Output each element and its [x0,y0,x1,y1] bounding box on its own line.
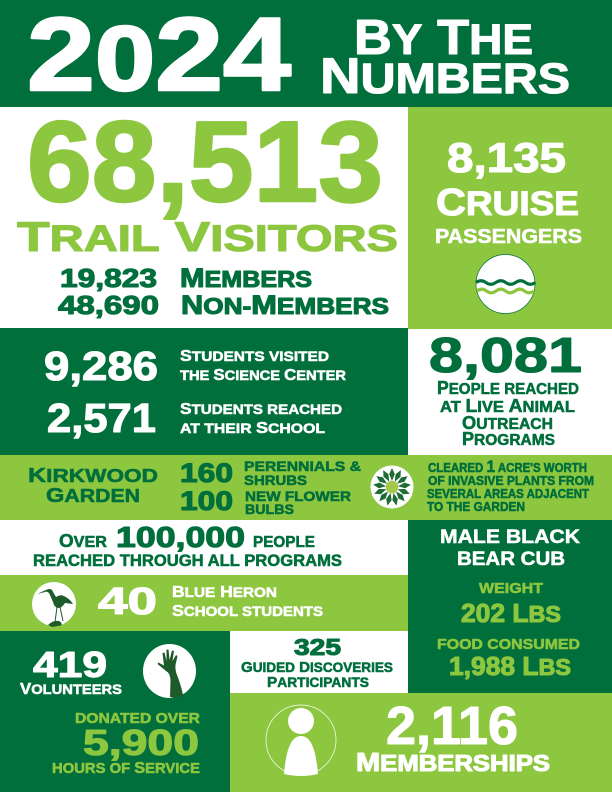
heading: trail visitors: TRAIL V ISITORS [17,213,398,260]
panel: guided discoveries [230,631,408,693]
number: 100: 100 [180,486,233,516]
number: 40: 40 [98,581,157,623]
number: trail visitors total: 68,513 [27,99,383,226]
label: participants: PARTICIPANTS [267,674,369,691]
number: 100,000: 100,000 [116,522,245,554]
label: hours of service: HOURS OF SERVICE [52,760,200,777]
heading: garden: GARDEN [46,485,140,507]
number: bear weight: 202 LBS [461,598,561,628]
number: memberships: 2,116 [386,696,518,756]
panel: blue heron school [0,575,408,631]
icon: heron [32,582,76,627]
label: programs: PROGRAMS [462,429,555,449]
panel: live animal outreach [408,329,612,455]
text: over: OVER [59,531,107,551]
label: guided discoveries: GUIDED DISCOVERIES [241,659,393,676]
text: cleared line 1: CLEARED 1 ACRE'S WORTH [428,457,587,476]
label: passengers: PASSENGERS [435,226,582,248]
label: the science center: THE SCIENCE CENTER [180,367,346,384]
panel: memberships [230,693,612,792]
panel: volunteers [0,631,230,792]
label: non-members: NON-MEMBERS [181,290,389,320]
label: bulbs: BULBS [245,501,294,517]
icon: water waves [476,254,535,314]
label: people reached: PEOPLE REACHED [437,378,579,398]
heading: kirkwood: KIRKWOOD [28,465,158,487]
label: memberships: MEMBERSHIPS [356,747,550,777]
heading: male black: MALE BLACK [440,526,580,548]
number: hours: 5,900 [83,722,199,763]
title: By The: BY THE [354,11,533,65]
panel: students [0,329,408,455]
title: 2024: 2024 [27,0,291,113]
heading: cruise: CRUISE [436,182,579,224]
label: food consumed: FOOD CONSUMED [437,637,580,653]
number: food consumed: 1,988 LBS [449,651,571,681]
icon: flower [370,466,414,508]
label: at their school: AT THEIR SCHOOL [180,420,325,437]
number: participants: 325 [294,634,341,660]
number: people reached: 8,081 [429,329,582,383]
heading: bear cub: BEAR CUB [457,548,565,570]
label: students reached: STUDENTS REACHED [180,401,342,418]
number: volunteers: 419 [33,644,107,685]
label: outreach: OUTREACH [462,413,553,433]
text: people: PEOPLE [253,534,315,551]
number: 160: 160 [180,458,233,488]
label: new flower: NEW FLOWER [245,488,351,504]
number: school students: 2,571 [47,395,156,441]
icon: raised hand [143,644,196,698]
label: shrubs: SHRUBS [244,472,307,488]
number: science center students: 9,286 [44,343,158,389]
text: cleared line 4: TO THE GARDEN [427,500,525,514]
icon: person [266,705,336,776]
label: blue heron: BLUE HERON [172,584,277,601]
label: perennials: PERENNIALS & [244,458,361,474]
panel: header [0,0,612,113]
text: reached through all programs: REACHED THROUGH ALL PROGRAMS [33,552,342,570]
text: cleared line 2: OF INVASIVE PLANTS FROM [428,474,594,488]
panel: all programs [0,520,408,575]
text: cleared line 3: SEVERAL AREAS ADJACENT [427,487,589,501]
number: non-members: 48,690 [58,290,159,320]
label: school students: SCHOOL STUDENTS [172,603,323,620]
label: donated over: DONATED OVER [75,711,201,727]
label: at live animal: AT LIVE ANIMAL [440,396,575,416]
label: members: MEMBERS [180,263,312,293]
title: Numbers: NUMBERS [320,48,570,104]
panel: cruise passengers [408,107,612,329]
number: members: 19,823 [60,263,157,293]
panel: male black bear cub [408,520,612,693]
label: weight: WEIGHT [479,581,543,597]
label: volunteers: VOLUNTEERS [20,681,122,698]
panel: kirkwood garden [0,455,612,520]
number: cruise passengers: 8,135 [447,134,566,181]
label: students visited: STUDENTS VISITED [180,348,329,365]
panel: trail visitors [0,99,408,329]
